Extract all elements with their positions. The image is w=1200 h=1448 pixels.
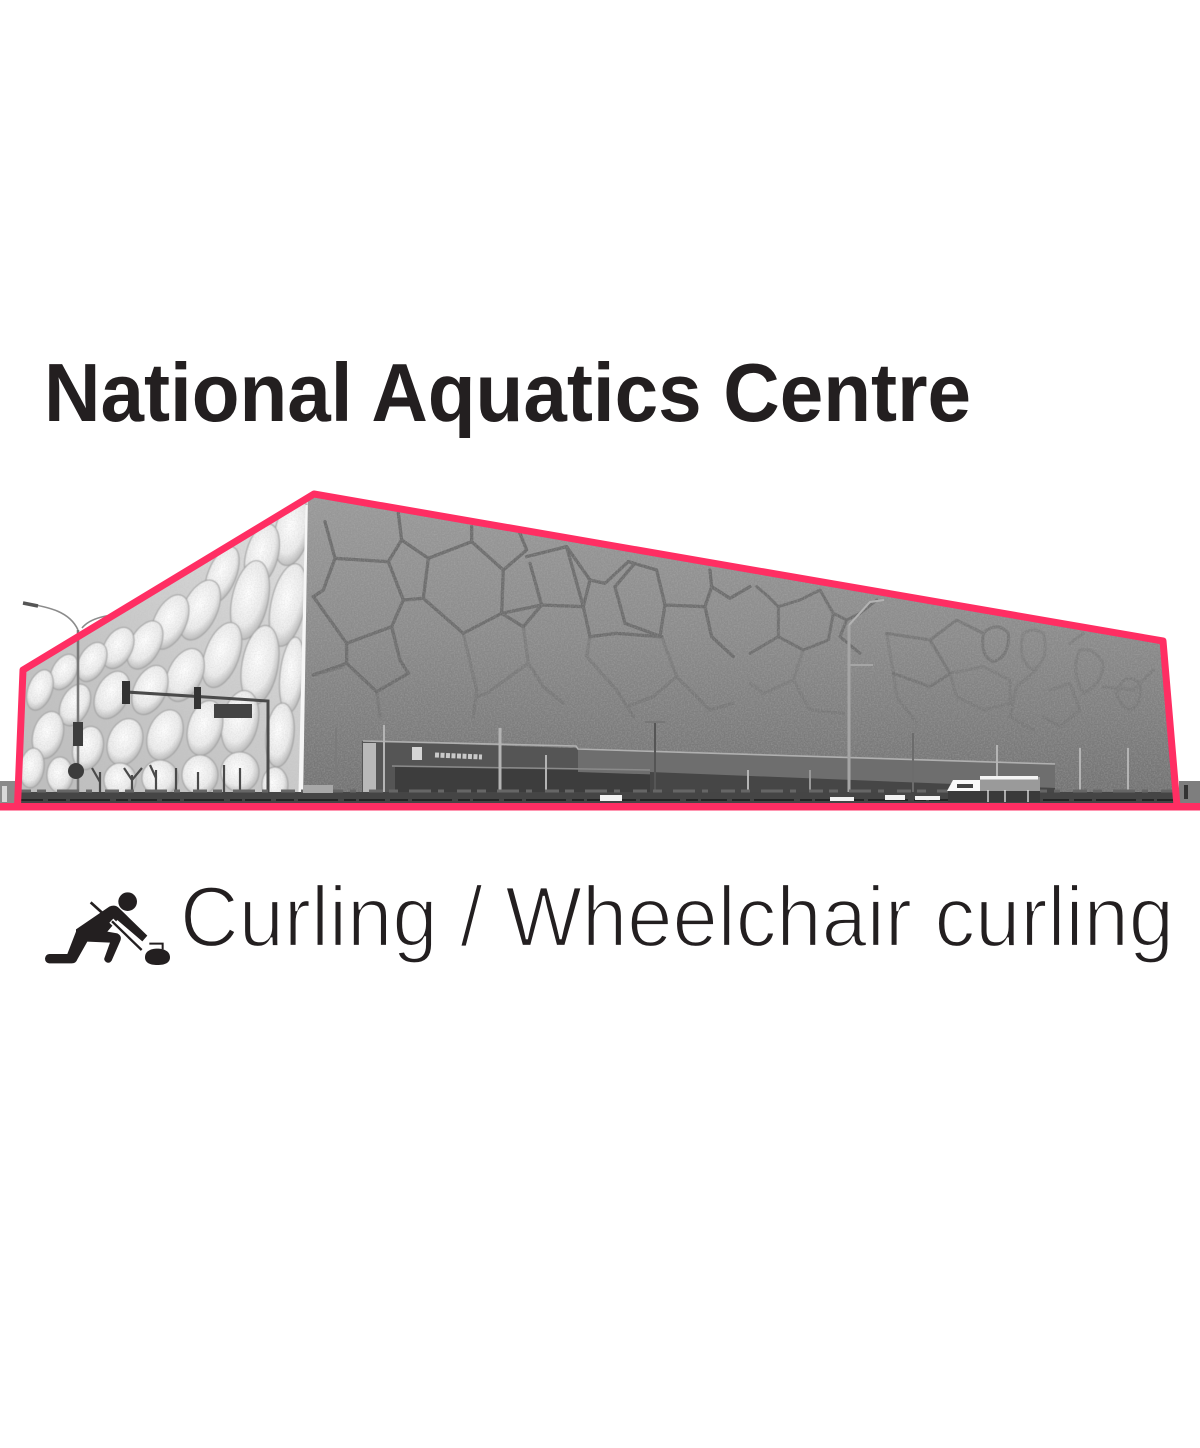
pink ground line xyxy=(0,803,1200,810)
curling stone xyxy=(145,949,170,965)
icon: curling athlete xyxy=(45,892,170,965)
venue card xyxy=(0,361,1200,965)
traffic signals xyxy=(68,630,268,802)
large cell pattern, left section xyxy=(313,513,750,717)
title: National Aquatics Centre xyxy=(44,346,971,439)
trees and street-level clutter xyxy=(17,765,1177,803)
white van xyxy=(947,776,1040,802)
stone handle xyxy=(149,944,163,949)
sport label: Curling / Wheelchair curling xyxy=(180,870,1174,965)
broom handle xyxy=(91,902,108,918)
broom gap xyxy=(111,921,142,950)
head xyxy=(118,892,137,911)
low entrance building xyxy=(362,741,1055,802)
poles and street furniture xyxy=(336,600,1128,802)
light facade with bubble panels xyxy=(22,502,308,792)
pink outline xyxy=(18,494,1177,806)
building photo xyxy=(0,480,1200,810)
body silhouette xyxy=(45,906,147,963)
broom lower shaft xyxy=(112,921,142,950)
large cell pattern, right section xyxy=(750,587,1153,730)
dark facade xyxy=(303,498,1172,792)
street lamp arm above roof xyxy=(23,603,135,630)
ground outside outline xyxy=(0,781,1200,803)
